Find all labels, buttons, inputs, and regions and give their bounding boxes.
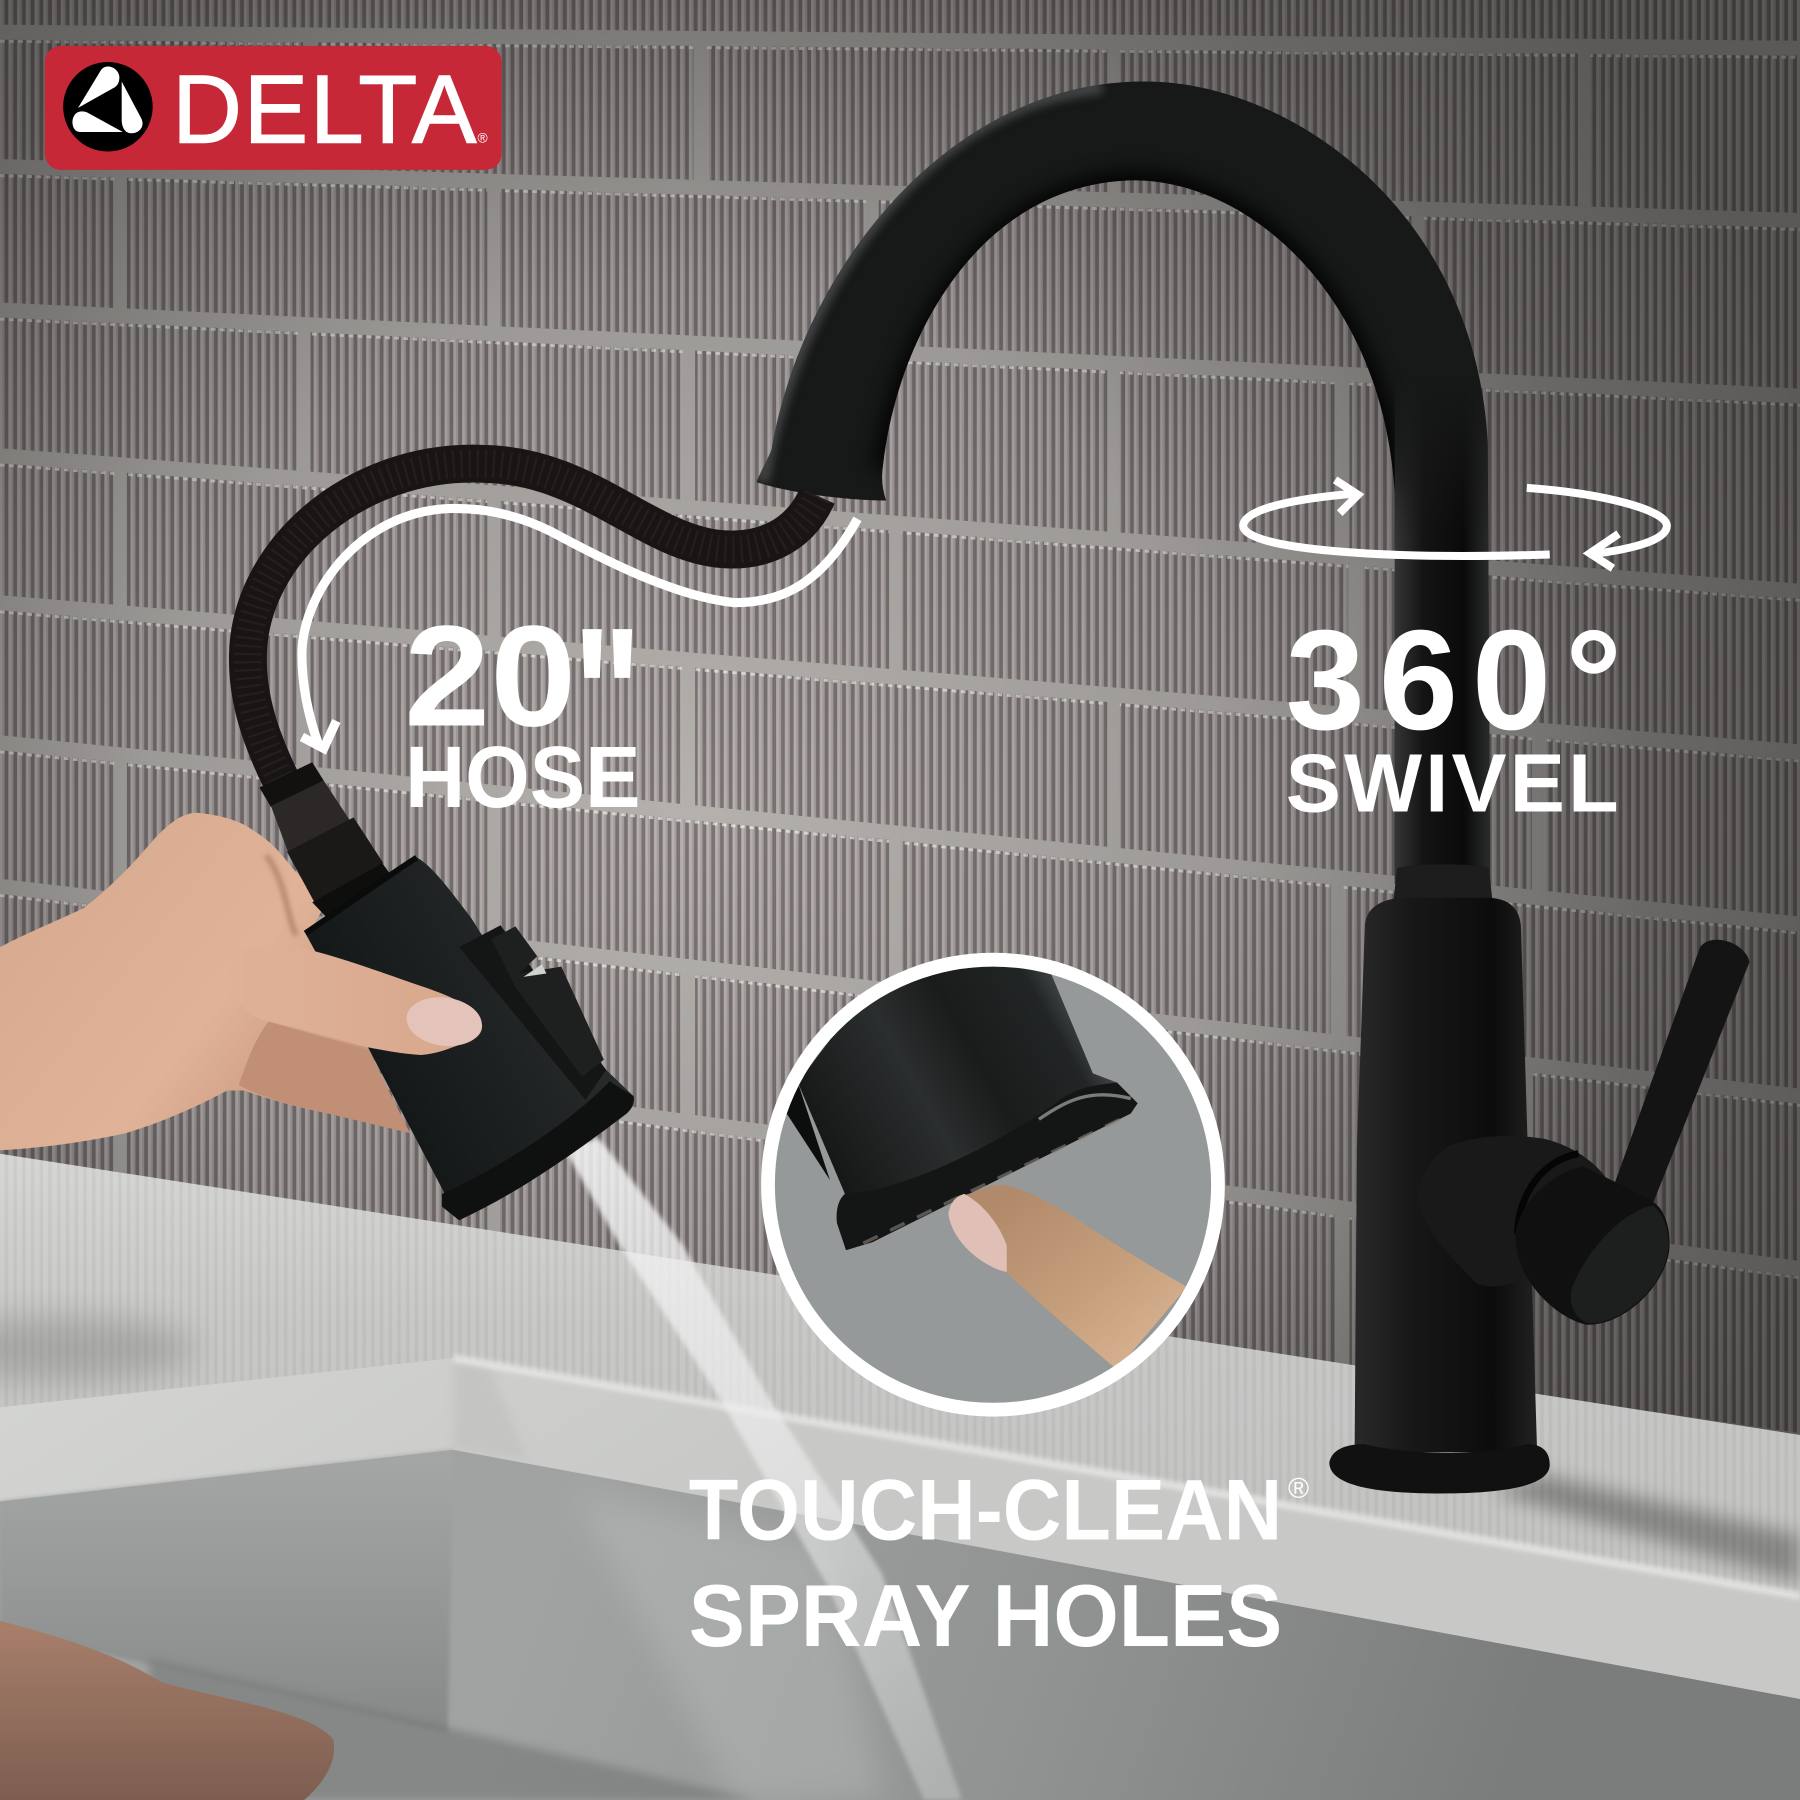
label: touch-clean spray holes: TOUCH-CLEAN xyxy=(689,1462,1282,1558)
pull-out hose xyxy=(248,464,817,781)
sprayer flange xyxy=(442,1081,634,1220)
label: 20 inch hose: " xyxy=(573,587,642,805)
faucet body xyxy=(1355,898,1537,1452)
faucet base flange xyxy=(1329,1444,1550,1493)
sprayer top ring xyxy=(305,858,417,933)
handle hub xyxy=(1417,1136,1609,1287)
label: 360 degree swivel: SWIVEL xyxy=(1286,737,1619,830)
inset trigger xyxy=(785,1083,830,1180)
index finger crease xyxy=(266,855,296,936)
countertop xyxy=(0,1154,1800,1800)
thumb xyxy=(229,945,485,1055)
inset fingernail xyxy=(948,1194,1007,1272)
rim highlight xyxy=(453,1358,1800,1596)
Delta logo badge xyxy=(45,46,502,170)
hose connector xyxy=(259,762,402,924)
hand holding sprayer xyxy=(0,813,410,1150)
label: touch-clean spray holes: ® xyxy=(1288,1473,1309,1505)
cap face sheen xyxy=(1571,1205,1669,1324)
inset nozzle body xyxy=(798,953,1138,1250)
sink basin xyxy=(0,1450,1800,1800)
hub ring xyxy=(1518,1154,1578,1234)
label: 20 inch hose: HOSE xyxy=(405,729,641,826)
spray head xyxy=(305,858,634,1220)
label: 20 inch hose: 20 xyxy=(404,597,576,757)
inset nozzle flange xyxy=(837,1083,1138,1250)
handle lever xyxy=(1613,940,1749,1203)
inset circle: touch-clean nozzle xyxy=(768,953,1218,1410)
sink rim xyxy=(0,1358,1800,1699)
Delta logo badge: ® xyxy=(478,130,488,145)
basin floor xyxy=(149,1659,758,1800)
faucet shadow on counter xyxy=(1492,1475,1800,1582)
spout sheen xyxy=(762,87,1490,884)
faucet spout xyxy=(757,81,1490,884)
inset flange highlight xyxy=(1039,1095,1131,1119)
basin left wall xyxy=(0,1450,453,1733)
water stream xyxy=(562,1139,962,1800)
fingers under sprayer xyxy=(239,1022,410,1133)
inset spray holes xyxy=(863,1116,1127,1243)
sprayer toggle base xyxy=(459,925,606,1100)
label: touch-clean spray holes xyxy=(689,1462,1309,1665)
sprayer toggle glint xyxy=(523,964,546,977)
palm xyxy=(0,813,410,1150)
Delta logo badge: DELTA xyxy=(172,56,477,163)
label: 360 degree swivel: 360° xyxy=(1286,601,1622,760)
hose length arrow xyxy=(302,508,858,748)
label: 20 inch hose xyxy=(404,587,642,826)
sprayer toggle button xyxy=(491,926,604,1077)
basin lit wedge xyxy=(574,1492,884,1800)
thumbnail xyxy=(403,993,485,1051)
faucet collar xyxy=(1394,864,1492,900)
inset finger xyxy=(948,1185,1187,1370)
swivel arrows xyxy=(1243,480,1667,568)
faucet xyxy=(757,81,1749,1493)
counter dark reflection xyxy=(0,1317,195,1381)
second hand at sink edge xyxy=(0,1621,334,1800)
logo emblem xyxy=(63,62,153,152)
rim corner shade xyxy=(453,1358,528,1460)
label: touch-clean spray holes: SPRAY HOLES xyxy=(689,1566,1282,1665)
handle cap xyxy=(1515,1166,1670,1325)
label: 360 degree swivel xyxy=(1286,601,1622,830)
